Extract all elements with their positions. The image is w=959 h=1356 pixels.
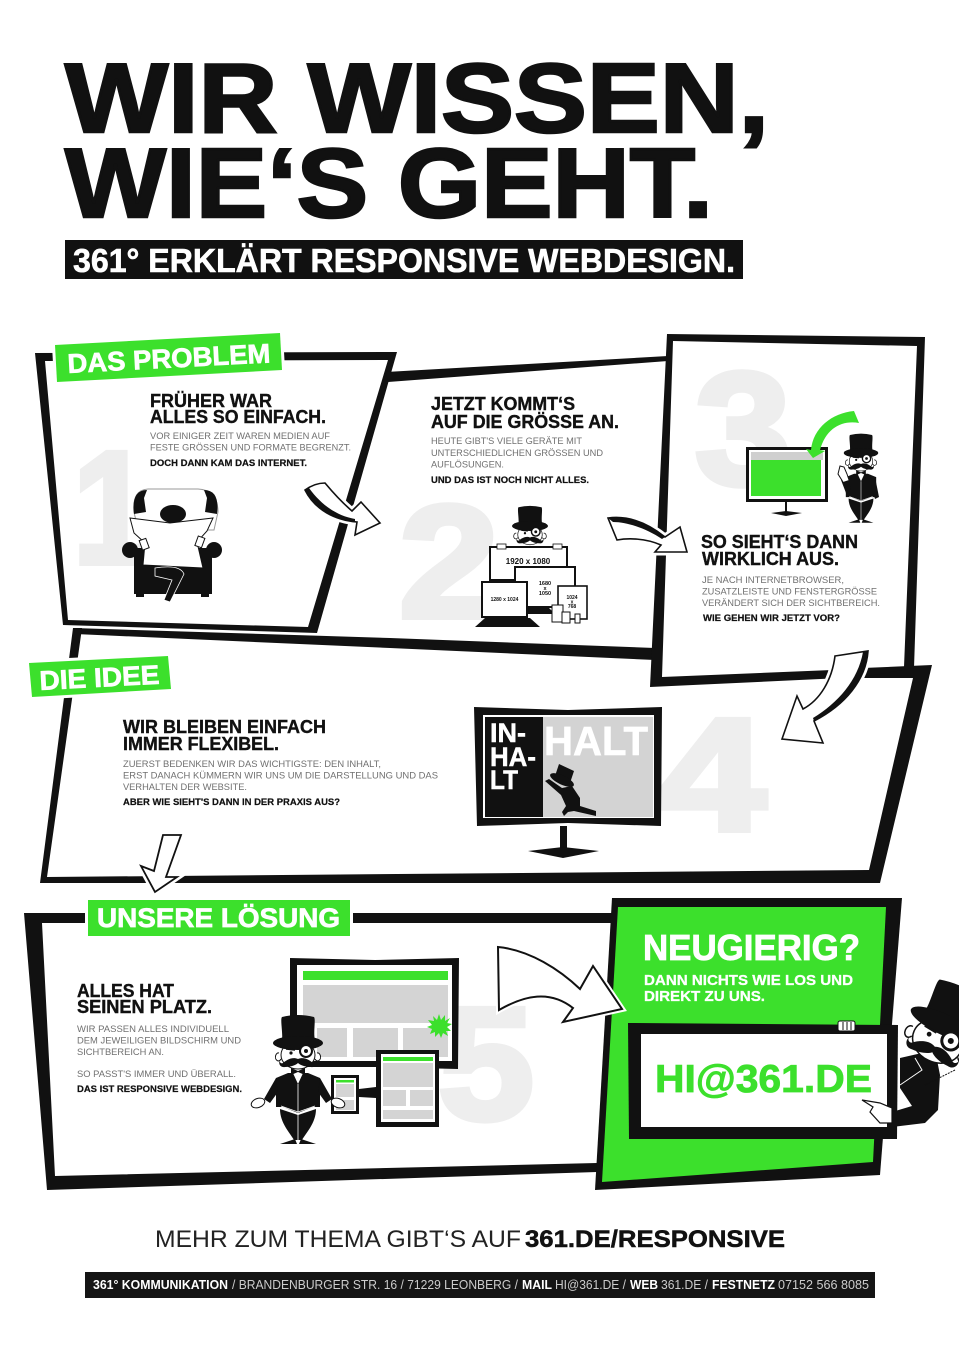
footer contact bar: / BRANDENBURGER STR. 16 / 71229 LEONBERG /	[232, 1278, 519, 1292]
icon: mascot presenting devices	[250, 1015, 346, 1144]
heading 3: SO SIEHT‘S DANN	[701, 531, 858, 552]
icon: mascot behind screens: x	[571, 600, 574, 606]
email box	[628, 1023, 898, 1139]
icon: man reading newspaper in armchair	[122, 489, 222, 602]
heading 5	[77, 980, 212, 1017]
text block 2: HEUTE GIBT'S VIELE GERÄTE MIT	[431, 436, 583, 446]
text block 3: ZUSATZLEISTE UND FENSTERGRÖSSE	[702, 586, 877, 596]
panel 3 number: 3	[695, 339, 791, 518]
link line: 361.DE/RESPONSIVE	[525, 1226, 785, 1253]
arrow: step 1 to 2	[305, 483, 380, 535]
text block 5: DAS IST RESPONSIVE WEBDESIGN.	[77, 1084, 242, 1094]
panel: problem step 1	[35, 333, 397, 633]
icon: monitor with content and pushing mascot: IN-	[490, 718, 526, 748]
link line: MEHR ZUM THEMA GIBT‘S AUF	[155, 1226, 521, 1253]
icon: monitor with content and pushing mascot: LT	[490, 765, 518, 795]
icon: mascot behind screens: 1920 x 1080	[506, 557, 551, 566]
text block 1: VOR EINIGER ZEIT WAREN MEDIEN AUF	[150, 431, 331, 441]
link line	[155, 1226, 785, 1253]
icon: peeking mascot	[838, 971, 959, 1127]
heading 2: JETZT KOMMT‘S	[431, 393, 575, 414]
panel 5 number: 5	[438, 974, 534, 1153]
icon: responsive phone layout	[331, 1075, 359, 1114]
text block 1	[150, 431, 351, 468]
panel 5 frame	[24, 913, 612, 1190]
panel: problem step 3	[650, 334, 925, 687]
text block 5	[77, 1024, 242, 1094]
arrow: step 2 to 3	[608, 517, 687, 552]
heading 1: ALLES SO EINFACH.	[150, 406, 326, 427]
footer contact bar: 361° KOMMUNIKATION	[93, 1278, 228, 1292]
text block 3: VERÄNDERT SICH DER SICHTBEREICH.	[702, 598, 880, 608]
icon: responsive tablet layout	[359, 1050, 439, 1127]
cta text: DIREKT ZU UNS.	[644, 988, 765, 1005]
text block 5: SICHTBEREICH AN.	[77, 1047, 164, 1057]
footer contact bar: 07152 566 8085	[778, 1278, 869, 1292]
cta text: DANN NICHTS WIE LOS UND	[644, 972, 853, 989]
text block 2: UNTERSCHIEDLICHEN GRÖSSEN UND	[431, 448, 604, 458]
icon: monitor with content and pushing mascot: HALT	[544, 718, 648, 764]
panel 1 number: 1	[73, 418, 151, 597]
icon: mascot behind screens: 1024	[566, 595, 578, 601]
text block 4: VERHALTEN DER WEBSITE.	[123, 782, 247, 792]
heading 1	[150, 390, 326, 427]
icon: mascot behind screens: x	[543, 586, 547, 592]
cta green fill	[602, 907, 886, 1182]
panel: solution step 5	[24, 897, 612, 1190]
icon: mascot behind screens: 1680	[539, 581, 551, 587]
title: WIE‘S GEHT.	[65, 128, 713, 238]
label: unsere lösung: UNSERE LÖSUNG	[97, 903, 340, 933]
text block 3	[702, 575, 880, 623]
heading 4	[123, 716, 326, 754]
text block 3: JE NACH INTERNETBROWSER,	[702, 575, 844, 585]
cta black frame	[595, 898, 902, 1190]
email box: HI@361.DE	[655, 1058, 872, 1101]
footer contact bar: MAIL	[522, 1278, 552, 1292]
text block 4: ERST DANACH KÜMMERN WIR UNS UM DIE DARSTELLUNG UND DAS	[123, 770, 438, 780]
icon: mascot behind screens: 1280 x 1024	[491, 597, 519, 603]
arrow: step 3 to 4	[782, 651, 868, 743]
heading 4: WIR BLEIBEN EINFACH	[123, 716, 326, 737]
heading 2	[431, 393, 619, 432]
footer contact bar: HI@361.DE /	[555, 1278, 627, 1292]
text block 4: ZUERST BEDENKEN WIR DAS WICHTIGSTE: DEN INHALT,	[123, 759, 381, 769]
text block 1: FESTE GRÖSSEN UND FORMATE BEGRENZT.	[150, 442, 351, 452]
icon: monitor with content and pushing mascot	[474, 707, 662, 858]
footer contact bar: FESTNETZ	[712, 1278, 775, 1292]
icon: monitor with green viewport	[746, 447, 828, 516]
panel: call to action	[595, 898, 959, 1190]
text block 2	[431, 436, 604, 485]
panel 1 frame	[35, 352, 397, 633]
text block 5: WIR PASSEN ALLES INDIVIDUELL	[77, 1024, 229, 1034]
heading 5: SEINEN PLATZ.	[77, 996, 212, 1017]
panel 3 frame	[650, 334, 925, 687]
label: die idee: DIE IDEE	[39, 660, 160, 696]
text block 2: AUFLÖSUNGEN.	[431, 460, 504, 470]
heading 3	[701, 531, 858, 569]
text block 5: DEM JEWEILIGEN BILDSCHIRM UND	[77, 1036, 242, 1046]
cta heading: NEUGIERIG?	[643, 927, 860, 968]
icon: mascot pointing up	[838, 434, 879, 523]
text block 2: UND DAS IST NOCH NICHT ALLES.	[431, 475, 589, 485]
cta text	[644, 972, 853, 1005]
footer contact bar: 361.DE /	[661, 1278, 709, 1292]
text block 1: DOCH DANN KAM DAS INTERNET.	[150, 458, 307, 468]
label: unsere lösung	[85, 897, 353, 939]
title	[65, 43, 769, 238]
label: das problem: DAS PROBLEM	[67, 338, 271, 379]
subtitle bar: 361° ERKLÄRT RESPONSIVE WEBDESIGN.	[73, 242, 735, 279]
icon: mascot behind screens: 768	[568, 604, 576, 610]
footer contact bar	[85, 1272, 875, 1298]
heading 4: IMMER FLEXIBEL.	[123, 733, 279, 754]
panel 4 frame	[40, 628, 932, 883]
icon: mascot behind screens	[475, 506, 587, 627]
icon: mascot behind screens: 1050	[539, 591, 551, 597]
panel 4 number: 4	[658, 685, 766, 864]
panel 2 number: 2	[399, 472, 499, 651]
title: WIR WISSEN,	[65, 43, 769, 153]
panel: problem step 2	[386, 356, 668, 651]
icon: monitor with content and pushing mascot: HA-	[490, 742, 536, 772]
panel 2 top bar	[386, 356, 668, 382]
text block 5: SO PASST'S IMMER UND ÜBERALL.	[77, 1069, 236, 1079]
footer contact bar: WEB	[630, 1278, 658, 1292]
arrow: step 4 to 5	[141, 835, 181, 892]
arrow: step 5 to cta	[498, 947, 622, 1022]
heading 1: FRÜHER WAR	[150, 390, 272, 411]
heading 5: ALLES HAT	[77, 980, 175, 1001]
text block 4	[123, 759, 438, 807]
text block 3: WIE GEHEN WIR JETZT VOR?	[703, 613, 840, 623]
heading 3: WIRKLICH AUS.	[702, 548, 839, 569]
heading 2: AUF DIE GRÖSSE AN.	[431, 411, 619, 432]
text block 4: ABER WIE SIEHT'S DANN IN DER PRAXIS AUS?	[123, 797, 340, 807]
arrow: green curved	[806, 411, 859, 458]
panel 4 top bar	[73, 628, 655, 660]
panel: idea step 4	[29, 628, 932, 883]
icon: responsive desktop layout	[290, 958, 459, 1069]
